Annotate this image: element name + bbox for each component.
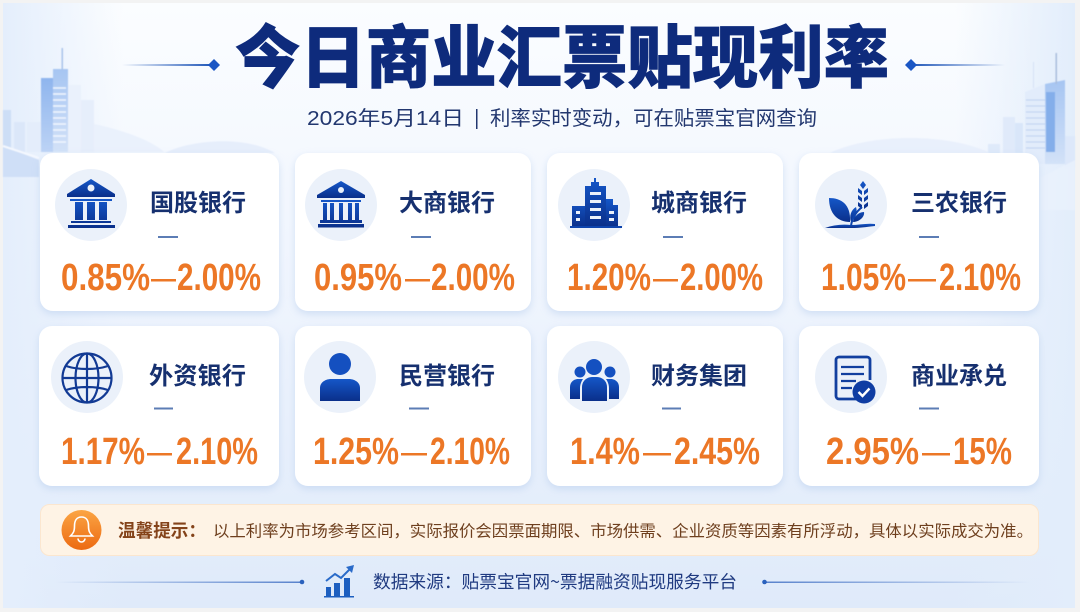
dash [663,236,683,238]
label: 大商银行 [399,190,495,217]
rate: 1.4% [570,431,640,473]
card: 民营银行 [295,326,531,486]
rate: — [653,257,678,299]
rate: — [147,431,172,473]
card: 商业承兑 [799,326,1039,486]
footer [55,565,1030,598]
reminder text: 以上利率为市场参考区间，实际报价会因票面期限、市场供需、企业资质等因素有所浮动，具体以实际成交为准。 [213,518,1033,542]
label: 国股银行 [150,190,246,217]
icon: document with check [815,341,887,413]
rate [567,257,763,299]
card: 国股银行 [40,153,279,311]
card: 财务集团 [547,326,783,486]
subtitle [307,102,817,131]
card: 外资银行 [39,326,279,486]
reminder heading: 温馨提示： [118,517,206,543]
rate [826,431,1012,473]
rate: 1.20% [567,257,651,299]
dash [158,236,178,238]
rate: 2.00% [431,257,515,299]
icon: person [304,341,376,413]
icon: bell [62,510,102,550]
title decoration left [122,59,220,71]
rate [314,257,515,299]
rate [61,257,261,299]
icon: wheat and leaf [815,169,887,241]
rate: — [922,431,950,473]
rate [313,431,510,473]
rate: — [401,431,427,473]
rate: 2.10% [430,431,510,473]
rate: 1.17% [61,431,145,473]
rate: 2.00% [680,257,763,299]
rate: — [405,257,430,299]
dash [154,408,173,410]
subtitle: 2026年5月14日 [307,107,464,130]
label: 外资银行 [149,363,246,390]
rate: 2.10% [939,257,1021,299]
icon: globe [51,341,123,413]
rate: 2.00% [177,257,261,299]
card: 大商银行 [295,153,531,311]
dash [662,408,681,410]
title: 今日商业汇票贴现利率 [235,3,889,102]
rate: 1.05% [821,257,906,299]
icon: buildings [558,169,630,241]
rate: — [151,257,176,299]
rate: — [908,257,936,299]
dash [919,236,939,238]
source text: 数据来源：贴票宝官网~票据融资贴现服务平台 [373,569,737,594]
icon: bank [55,169,127,241]
skyline left [3,48,275,177]
label: 商业承兑 [911,363,1007,390]
rate: 2.45% [674,431,760,473]
icon: group [558,341,630,413]
icon: bank columns [305,169,377,241]
label: 城商银行 [651,189,747,217]
label: 民营银行 [399,363,495,390]
rate: 2.95% [826,431,919,473]
rate [61,431,258,473]
rate: 0.95% [314,257,402,299]
dash [409,408,429,410]
rate [570,431,760,473]
rate: 0.85% [61,257,150,299]
callout: reminder [40,504,1038,556]
rate: 1.25% [313,431,399,473]
card: 三农银行 [799,153,1039,311]
icon: growth chart [324,565,354,598]
skyline right [830,53,1075,210]
title decoration right [905,59,1005,71]
rate: 15% [953,431,1012,473]
rate: 2.10% [176,431,258,473]
dash [919,408,939,410]
rate [821,257,1021,299]
label: 财务集团 [651,363,747,390]
card: 城商银行 [547,153,783,311]
rate: — [643,431,671,473]
label: 三农银行 [911,190,1007,217]
subtitle: 利率实时变动，可在贴票宝官网查询 [490,102,817,131]
dash [411,236,431,238]
